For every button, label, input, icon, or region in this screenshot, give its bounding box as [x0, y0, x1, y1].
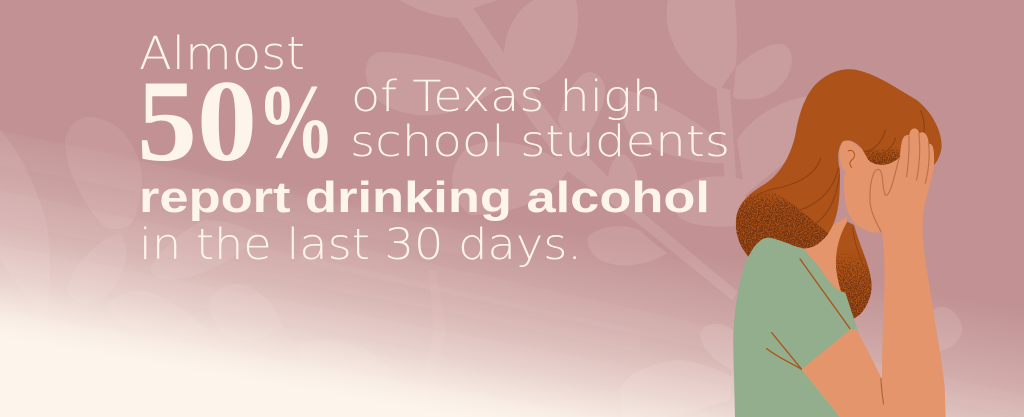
neck	[800, 217, 850, 298]
diagonal light streaks	[0, 130, 1024, 417]
face and ear	[840, 140, 917, 233]
upper arm	[802, 329, 884, 417]
main hair	[736, 69, 942, 257]
green shirt	[733, 238, 857, 417]
text: 50%	[137, 57, 335, 186]
hand covering face	[871, 128, 934, 250]
hair strands	[742, 111, 924, 230]
forearm	[882, 217, 946, 417]
text: school students: school students	[350, 117, 730, 167]
text: 50%: %	[257, 63, 335, 180]
text: 50%: 50	[137, 57, 257, 186]
ear detail	[848, 150, 854, 167]
back hair lock	[836, 222, 872, 319]
text: of Texas high: of Texas high	[351, 72, 662, 122]
hand and arm lines	[870, 133, 929, 404]
shirt fold lines	[767, 259, 850, 369]
woman figure covering her face	[733, 69, 946, 417]
text: Almost: Almost	[139, 27, 305, 80]
headline text	[137, 27, 730, 270]
text: in the last 30 days.: in the last 30 days.	[139, 220, 582, 270]
text: report drinking alcohol: report drinking alcohol	[139, 173, 710, 222]
